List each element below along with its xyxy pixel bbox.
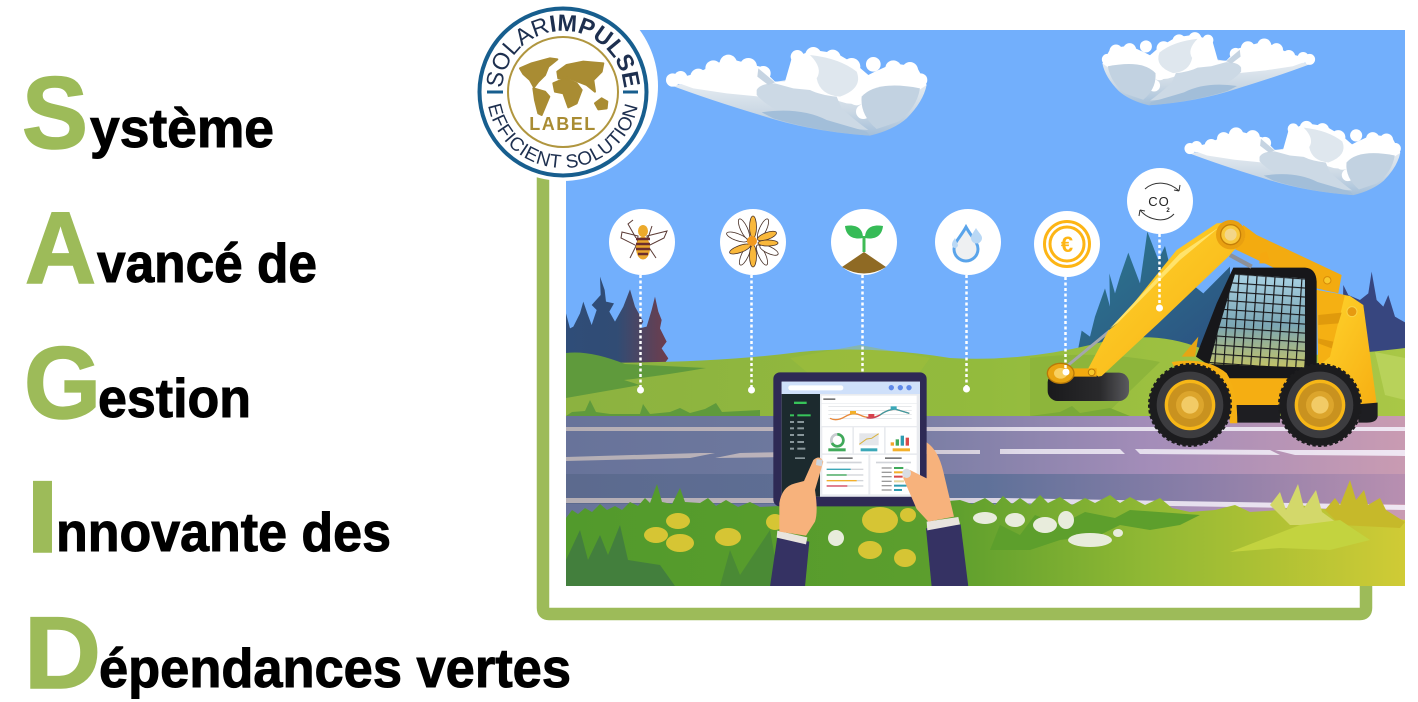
rear wheel — [1279, 364, 1361, 446]
rear body — [1317, 290, 1377, 407]
yellow flowers — [644, 507, 916, 567]
trees right — [1077, 232, 1407, 360]
cab — [1196, 268, 1317, 379]
line: Avancé de: vancé de — [97, 232, 317, 294]
illustration scene — [566, 30, 1407, 587]
line: Gestion — [24, 326, 251, 440]
line: Innovante des — [26, 460, 391, 574]
line: Gestion: G — [24, 326, 101, 440]
line: Innovante des: I — [26, 460, 59, 574]
white disc — [468, 0, 658, 181]
dashboard content — [820, 394, 920, 497]
line: Système: ystème — [90, 97, 274, 159]
cloud 1 — [666, 47, 927, 136]
line: Innovante des: nnovante des — [56, 501, 391, 563]
upper arm — [1233, 225, 1342, 293]
dashboard sidebar — [782, 394, 820, 497]
blue ring — [480, 8, 646, 176]
right hand — [902, 442, 968, 587]
logo: Solar Impulse label — [478, 6, 658, 181]
icon: daisy flower — [720, 209, 786, 275]
line: Système — [22, 56, 274, 170]
trees left — [566, 277, 668, 370]
cloud 3 — [1184, 121, 1401, 195]
line: Dépendances vertes — [24, 596, 571, 702]
line: Dépendances vertes: épendances vertes — [99, 637, 571, 699]
icon: CO2 cycle — [1127, 168, 1193, 234]
bucket — [1048, 373, 1129, 401]
cloud 2 — [1102, 32, 1315, 105]
icon: euro coin — [1034, 211, 1100, 277]
hills — [566, 337, 1405, 420]
gold ring — [508, 37, 618, 147]
piston — [1230, 255, 1252, 267]
top arc text: SOLARIMPULSE — [486, 14, 640, 88]
dotted connectors — [637, 234, 1163, 394]
icon: water drop — [935, 209, 1001, 275]
fender — [1172, 361, 1237, 423]
label word: LABEL — [529, 114, 597, 134]
bottom arc text: EFFICIENT SOLUTION — [488, 104, 638, 168]
ticks — [487, 90, 638, 94]
road — [566, 416, 1405, 528]
line: Système: S — [22, 56, 88, 170]
icon: bee — [609, 209, 675, 275]
tablet with dashboard — [770, 372, 968, 587]
line: Avancé de — [25, 191, 317, 305]
green frame — [543, 170, 1366, 614]
boom — [1088, 222, 1245, 377]
icon: euro coin: € — [1061, 232, 1073, 257]
excavator — [1047, 220, 1378, 446]
title: SAGID acronym — [22, 56, 571, 702]
icon: sprout — [831, 209, 897, 275]
line: Gestion: estion — [98, 367, 251, 429]
sky — [566, 30, 1405, 370]
icon: CO2 cycle: CO — [1148, 194, 1170, 209]
white flowers — [828, 511, 1123, 547]
front wheel — [1149, 364, 1231, 446]
world map — [520, 58, 607, 115]
icon: CO2 cycle: 2 — [1166, 208, 1170, 214]
line: Avancé de: A — [25, 191, 96, 305]
chassis — [1227, 378, 1288, 407]
left hand — [770, 458, 823, 587]
foreground grass — [566, 480, 1405, 586]
